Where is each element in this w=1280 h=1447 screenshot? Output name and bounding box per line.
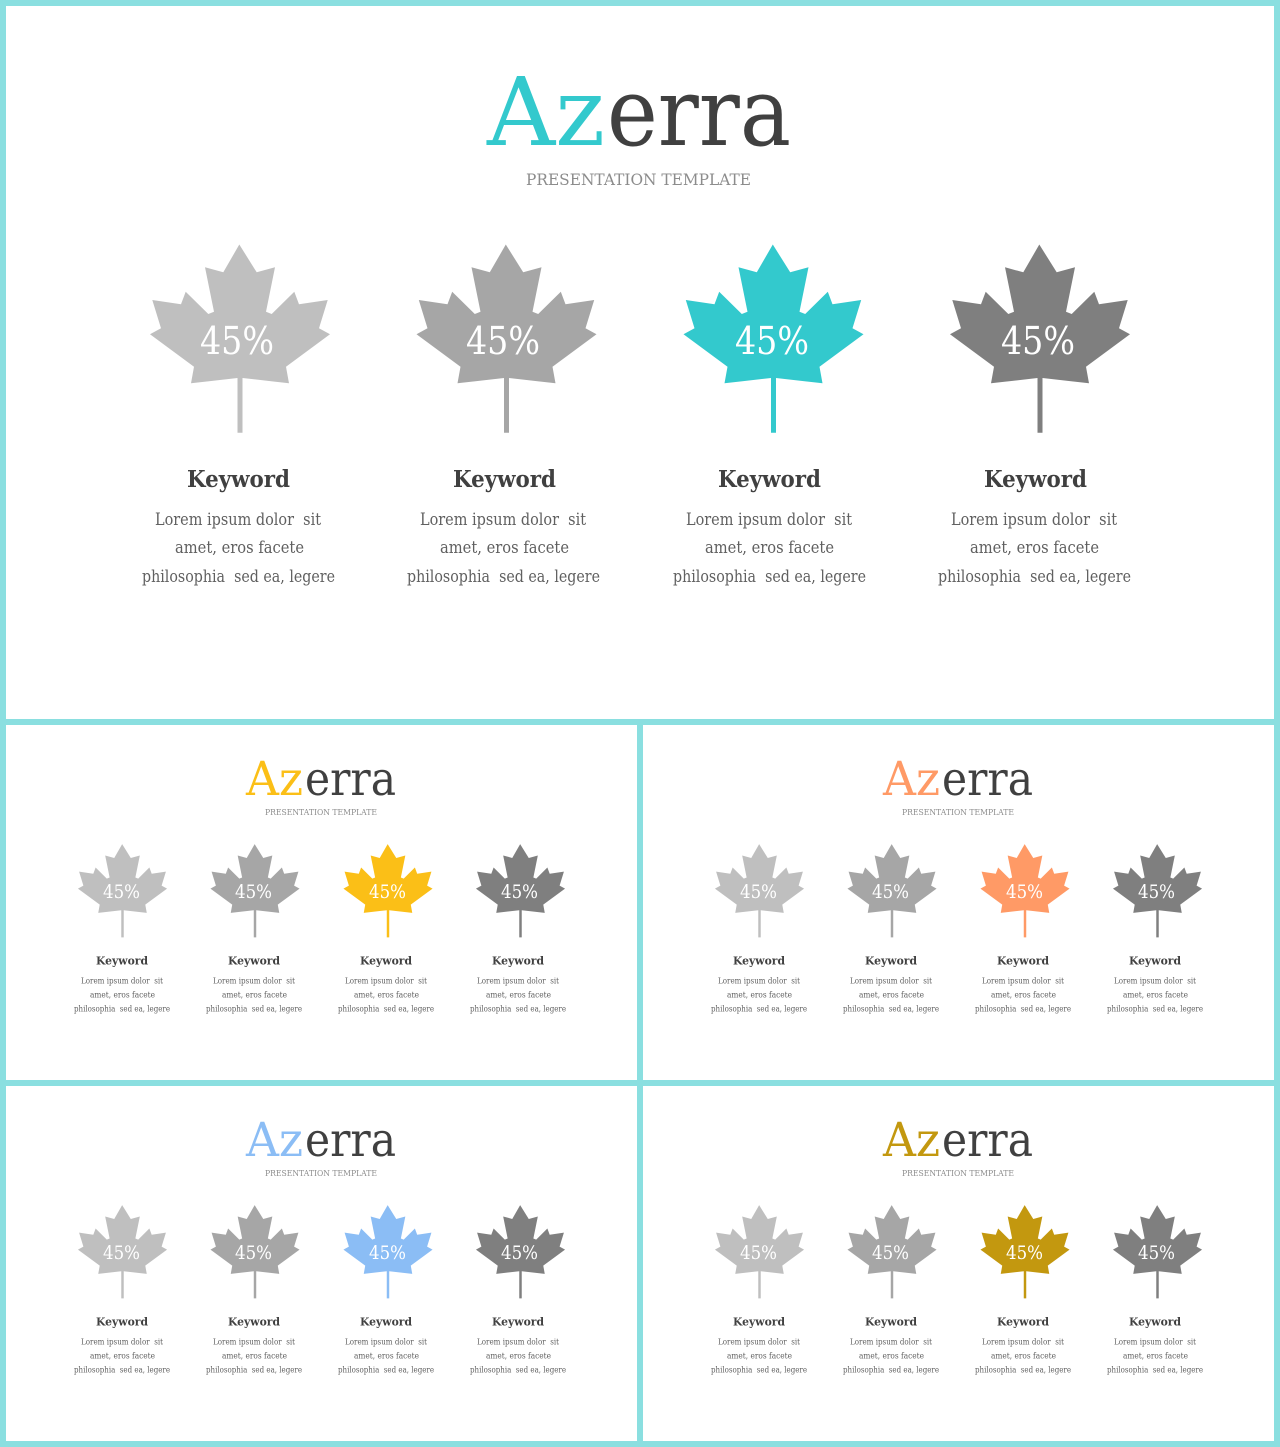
percentage: 45% bbox=[501, 881, 538, 903]
description: Lorem ipsum dolor sit bbox=[718, 1338, 800, 1348]
description: philosophia sed ea, legere bbox=[843, 1004, 939, 1014]
description: Lorem ipsum dolor sit bbox=[213, 976, 295, 986]
card 3 bbox=[673, 244, 866, 587]
percentage: 45% bbox=[1138, 881, 1175, 903]
panel: main slide, teal bbox=[142, 58, 1131, 587]
card 4 bbox=[1107, 844, 1203, 1014]
card 3 bbox=[975, 844, 1071, 1014]
subtitle: PRESENTATION TEMPLATE bbox=[265, 808, 377, 817]
panel: small slide, orange bbox=[711, 752, 1203, 1014]
keyword: Keyword bbox=[453, 466, 556, 493]
description: philosophia sed ea, legere bbox=[1107, 1366, 1203, 1376]
keyword: Keyword bbox=[1129, 1314, 1181, 1328]
description: philosophia sed ea, legere bbox=[142, 567, 335, 587]
description: Lorem ipsum dolor sit bbox=[850, 1338, 932, 1348]
description bbox=[74, 1338, 170, 1376]
description: philosophia sed ea, legere bbox=[206, 1366, 302, 1376]
description: Lorem ipsum dolor sit bbox=[345, 1338, 427, 1348]
description: amet, eros facete bbox=[90, 990, 155, 1000]
subtitle: PRESENTATION TEMPLATE bbox=[902, 1169, 1014, 1178]
card 2 bbox=[843, 844, 939, 1014]
description: philosophia sed ea, legere bbox=[470, 1366, 566, 1376]
description: philosophia sed ea, legere bbox=[843, 1366, 939, 1376]
icon: maple leaf, dark grey bbox=[476, 1205, 565, 1298]
keyword: Keyword bbox=[1129, 954, 1181, 968]
title: Azerra: erra bbox=[942, 1113, 1033, 1168]
description bbox=[206, 1338, 302, 1376]
card 4 bbox=[470, 1205, 566, 1376]
description: Lorem ipsum dolor sit bbox=[718, 976, 800, 986]
icon: maple leaf, light grey bbox=[78, 844, 167, 937]
icon: maple leaf, mid grey bbox=[847, 844, 937, 937]
description: Lorem ipsum dolor sit bbox=[345, 976, 427, 986]
description: Lorem ipsum dolor sit bbox=[213, 1338, 295, 1348]
description: philosophia sed ea, legere bbox=[74, 1004, 170, 1014]
keyword: Keyword bbox=[997, 1314, 1049, 1328]
description bbox=[711, 1338, 807, 1376]
icon: maple leaf, gold bbox=[980, 1205, 1070, 1298]
title: Azerra: Az bbox=[245, 1113, 303, 1168]
description: philosophia sed ea, legere bbox=[206, 1004, 302, 1014]
description bbox=[338, 1338, 434, 1376]
description: amet, eros facete bbox=[705, 538, 834, 558]
description bbox=[142, 510, 335, 587]
description: amet, eros facete bbox=[727, 990, 792, 1000]
description: Lorem ipsum dolor sit bbox=[951, 510, 1117, 530]
description: philosophia sed ea, legere bbox=[673, 567, 866, 587]
percentage: 45% bbox=[1001, 319, 1075, 363]
description: philosophia sed ea, legere bbox=[938, 567, 1131, 587]
keyword: Keyword bbox=[360, 1314, 412, 1328]
keyword: Keyword bbox=[865, 1314, 917, 1328]
description bbox=[843, 976, 939, 1014]
keyword: Keyword bbox=[187, 466, 290, 493]
keyword: Keyword bbox=[997, 954, 1049, 968]
percentage: 45% bbox=[466, 319, 540, 363]
percentage: 45% bbox=[200, 319, 274, 363]
description: Lorem ipsum dolor sit bbox=[155, 510, 321, 530]
description: philosophia sed ea, legere bbox=[975, 1366, 1071, 1376]
keyword: Keyword bbox=[718, 466, 821, 493]
icon: maple leaf, light grey bbox=[715, 1205, 804, 1298]
description: amet, eros facete bbox=[440, 538, 569, 558]
title: Azerra bbox=[486, 58, 791, 168]
description: amet, eros facete bbox=[991, 990, 1056, 1000]
description bbox=[938, 510, 1131, 587]
description bbox=[338, 976, 434, 1014]
card 2 bbox=[407, 244, 600, 587]
description bbox=[74, 976, 170, 1014]
description: amet, eros facete bbox=[175, 538, 304, 558]
card 2 bbox=[206, 844, 302, 1014]
icon: maple leaf, mid grey bbox=[210, 844, 300, 937]
description: amet, eros facete bbox=[970, 538, 1099, 558]
description: philosophia sed ea, legere bbox=[1107, 1004, 1203, 1014]
description: Lorem ipsum dolor sit bbox=[81, 976, 163, 986]
percentage: 45% bbox=[740, 1242, 777, 1264]
percentage: 45% bbox=[501, 1242, 538, 1264]
description: amet, eros facete bbox=[222, 990, 287, 1000]
card 3 bbox=[338, 844, 434, 1014]
card 2 bbox=[206, 1205, 302, 1376]
description: amet, eros facete bbox=[1123, 990, 1188, 1000]
icon: maple leaf, teal bbox=[684, 244, 864, 433]
keyword: Keyword bbox=[492, 1314, 544, 1328]
description bbox=[1107, 1338, 1203, 1376]
description: Lorem ipsum dolor sit bbox=[81, 1338, 163, 1348]
percentage: 45% bbox=[235, 881, 272, 903]
title: Azerra bbox=[245, 1113, 396, 1168]
description bbox=[407, 510, 600, 587]
card 4 bbox=[938, 244, 1131, 587]
description: philosophia sed ea, legere bbox=[711, 1004, 807, 1014]
card 3 bbox=[975, 1205, 1071, 1376]
description: philosophia sed ea, legere bbox=[711, 1366, 807, 1376]
percentage: 45% bbox=[1138, 1242, 1175, 1264]
card 1 bbox=[142, 244, 335, 587]
title: Azerra bbox=[882, 1113, 1033, 1168]
card 1 bbox=[74, 844, 170, 1014]
description bbox=[673, 510, 866, 587]
description bbox=[975, 1338, 1071, 1376]
description: philosophia sed ea, legere bbox=[470, 1004, 566, 1014]
description bbox=[975, 976, 1071, 1014]
percentage: 45% bbox=[740, 881, 777, 903]
keyword: Keyword bbox=[96, 954, 148, 968]
description: amet, eros facete bbox=[1123, 1352, 1188, 1362]
icon: maple leaf, mid grey bbox=[210, 1205, 300, 1298]
title: Azerra bbox=[245, 752, 396, 807]
icon: maple leaf, blue bbox=[343, 1205, 433, 1298]
keyword: Keyword bbox=[228, 1314, 280, 1328]
panel: small slide, yellow bbox=[74, 752, 566, 1014]
description: amet, eros facete bbox=[727, 1352, 792, 1362]
percentage: 45% bbox=[872, 1242, 909, 1264]
icon: maple leaf, dark grey bbox=[950, 244, 1130, 433]
description: amet, eros facete bbox=[354, 1352, 419, 1362]
description: amet, eros facete bbox=[486, 990, 551, 1000]
icon: maple leaf, mid grey bbox=[416, 244, 596, 433]
icon: maple leaf, light grey bbox=[715, 844, 804, 937]
description: Lorem ipsum dolor sit bbox=[477, 976, 559, 986]
description: Lorem ipsum dolor sit bbox=[686, 510, 852, 530]
panel: small slide, blue bbox=[74, 1113, 566, 1376]
icon: maple leaf, dark grey bbox=[1113, 1205, 1202, 1298]
title: Azerra: Az bbox=[245, 752, 303, 807]
keyword: Keyword bbox=[865, 954, 917, 968]
icon: maple leaf, mid grey bbox=[847, 1205, 937, 1298]
keyword: Keyword bbox=[492, 954, 544, 968]
description bbox=[843, 1338, 939, 1376]
keyword: Keyword bbox=[360, 954, 412, 968]
title: Azerra: Az bbox=[486, 58, 605, 168]
description bbox=[711, 976, 807, 1014]
description: Lorem ipsum dolor sit bbox=[1114, 976, 1196, 986]
title: Azerra: erra bbox=[305, 752, 396, 807]
description: Lorem ipsum dolor sit bbox=[420, 510, 586, 530]
title: Azerra: Az bbox=[882, 1113, 940, 1168]
description: Lorem ipsum dolor sit bbox=[982, 976, 1064, 986]
card 4 bbox=[470, 844, 566, 1014]
subtitle: PRESENTATION TEMPLATE bbox=[902, 808, 1014, 817]
description bbox=[470, 1338, 566, 1376]
description: philosophia sed ea, legere bbox=[338, 1004, 434, 1014]
description: amet, eros facete bbox=[354, 990, 419, 1000]
description bbox=[1107, 976, 1203, 1014]
title: Azerra: erra bbox=[305, 1113, 396, 1168]
card 1 bbox=[74, 1205, 170, 1376]
card 1 bbox=[711, 844, 807, 1014]
description: Lorem ipsum dolor sit bbox=[477, 1338, 559, 1348]
icon: maple leaf, yellow bbox=[343, 844, 433, 937]
description: amet, eros facete bbox=[486, 1352, 551, 1362]
icon: maple leaf, light grey bbox=[78, 1205, 167, 1298]
description: amet, eros facete bbox=[859, 1352, 924, 1362]
title: Azerra: Az bbox=[882, 752, 940, 807]
icon: maple leaf, orange bbox=[980, 844, 1070, 937]
percentage: 45% bbox=[1006, 881, 1043, 903]
card 1 bbox=[711, 1205, 807, 1376]
percentage: 45% bbox=[369, 1242, 406, 1264]
description: Lorem ipsum dolor sit bbox=[850, 976, 932, 986]
percentage: 45% bbox=[235, 1242, 272, 1264]
keyword: Keyword bbox=[733, 1314, 785, 1328]
subtitle: PRESENTATION TEMPLATE bbox=[265, 1169, 377, 1178]
percentage: 45% bbox=[872, 881, 909, 903]
description bbox=[470, 976, 566, 1014]
icon: maple leaf, light grey bbox=[150, 244, 330, 433]
description: philosophia sed ea, legere bbox=[338, 1366, 434, 1376]
title: Azerra bbox=[882, 752, 1033, 807]
percentage: 45% bbox=[103, 1242, 140, 1264]
icon: maple leaf, dark grey bbox=[476, 844, 565, 937]
description: Lorem ipsum dolor sit bbox=[982, 1338, 1064, 1348]
card 4 bbox=[1107, 1205, 1203, 1376]
keyword: Keyword bbox=[984, 466, 1087, 493]
description: Lorem ipsum dolor sit bbox=[1114, 1338, 1196, 1348]
description bbox=[206, 976, 302, 1014]
title: Azerra: erra bbox=[942, 752, 1033, 807]
description: philosophia sed ea, legere bbox=[975, 1004, 1071, 1014]
card 3 bbox=[338, 1205, 434, 1376]
percentage: 45% bbox=[103, 881, 140, 903]
icon: maple leaf, dark grey bbox=[1113, 844, 1202, 937]
card 2 bbox=[843, 1205, 939, 1376]
keyword: Keyword bbox=[228, 954, 280, 968]
description: amet, eros facete bbox=[859, 990, 924, 1000]
percentage: 45% bbox=[369, 881, 406, 903]
description: amet, eros facete bbox=[90, 1352, 155, 1362]
percentage: 45% bbox=[1006, 1242, 1043, 1264]
description: amet, eros facete bbox=[991, 1352, 1056, 1362]
panel: small slide, gold bbox=[711, 1113, 1203, 1376]
percentage: 45% bbox=[735, 319, 809, 363]
description: philosophia sed ea, legere bbox=[407, 567, 600, 587]
keyword: Keyword bbox=[733, 954, 785, 968]
keyword: Keyword bbox=[96, 1314, 148, 1328]
subtitle: PRESENTATION TEMPLATE bbox=[526, 170, 751, 189]
description: philosophia sed ea, legere bbox=[74, 1366, 170, 1376]
title: Azerra: erra bbox=[607, 58, 791, 168]
description: amet, eros facete bbox=[222, 1352, 287, 1362]
